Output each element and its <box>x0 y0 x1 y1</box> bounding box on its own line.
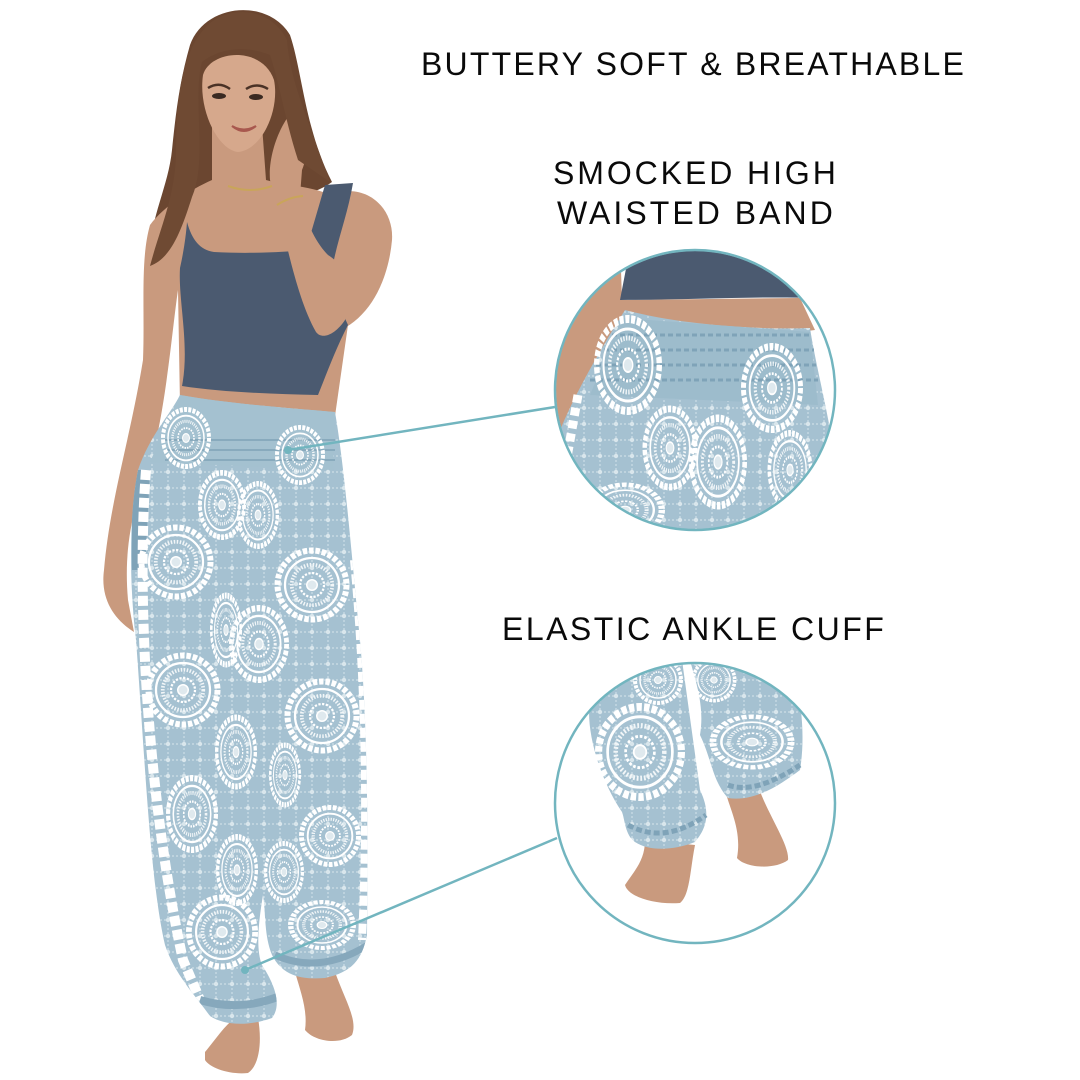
pants body <box>562 310 830 529</box>
heading: buttery soft: BUTTERY SOFT & BREATHABLE <box>421 46 967 82</box>
jewelry <box>228 186 303 205</box>
callout arrow: waistband <box>284 407 555 454</box>
upper arm right <box>300 191 392 336</box>
figure: model wearing pants <box>103 10 392 1073</box>
right cuff leg <box>690 660 803 799</box>
hair front <box>150 12 330 266</box>
heading: smocked band: WAISTED BAND <box>557 195 836 231</box>
hair back <box>150 10 332 272</box>
top hem <box>620 251 799 300</box>
face <box>202 55 275 152</box>
inset: waistband detail <box>550 240 845 535</box>
facial features <box>208 85 268 131</box>
heading: smocked band: SMOCKED HIGH <box>553 155 839 191</box>
crop top <box>180 183 353 395</box>
feet <box>205 1018 260 1073</box>
pants <box>131 395 368 1024</box>
smocked band <box>590 318 818 405</box>
heading: smocked band <box>553 155 839 231</box>
skin midriff and arm <box>556 272 815 428</box>
feet <box>625 840 695 903</box>
forearm and hand <box>270 112 349 336</box>
callout arrow: ankle <box>241 838 557 974</box>
left cuff leg <box>589 660 706 849</box>
torso and left arm skin <box>103 125 348 632</box>
heading: ankle cuff: ELASTIC ANKLE CUFF <box>502 611 887 647</box>
inset: ankle detail <box>550 657 840 950</box>
